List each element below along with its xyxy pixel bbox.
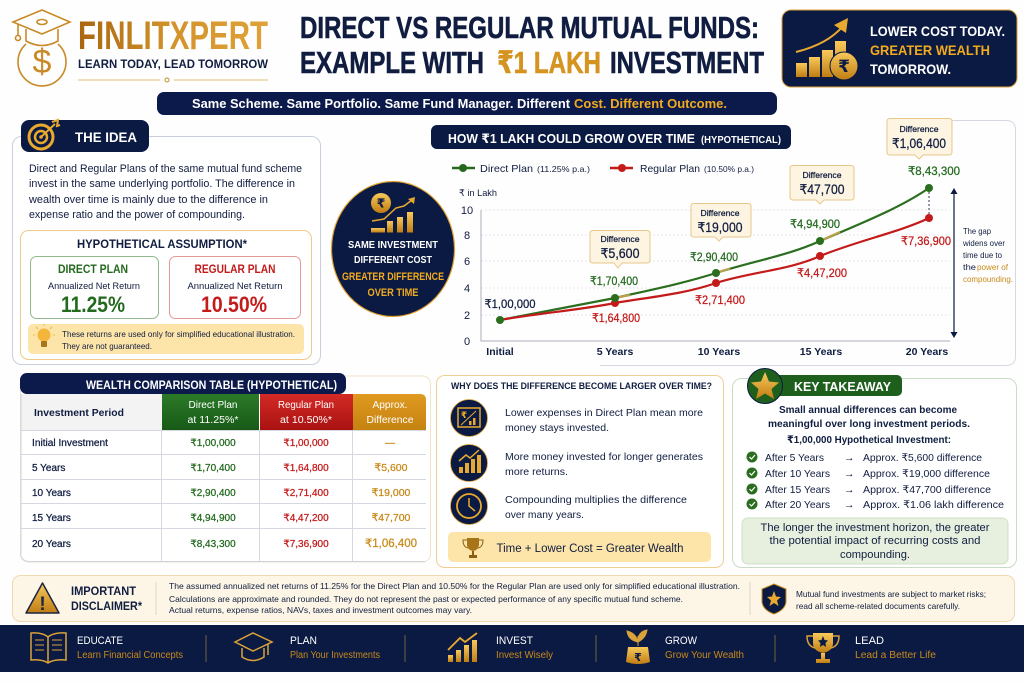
legend: (11.25% p.a.) <box>537 164 590 174</box>
footer item: grow <box>626 630 744 664</box>
table rows: ₹2,90,400 <box>190 488 236 499</box>
footer band <box>0 625 1024 672</box>
table rows: ₹19,000 <box>372 487 411 499</box>
callout: 5 year difference: ₹5,600 <box>600 246 640 261</box>
table header: Investment Period <box>34 407 124 419</box>
line chart: ₹ in Lakh <box>459 188 497 199</box>
line chart: ₹4,94,900 <box>790 217 840 231</box>
line chart: ₹1,64,800 <box>592 311 640 325</box>
text: idea paragraph: wealth over time is mainly due to the difference in <box>28 194 268 206</box>
footer item: educate: Learn Financial Concepts <box>77 650 183 661</box>
note: not guaranteed: These returns are used only for simplified educational illustration. <box>62 329 295 339</box>
callout: lower cost today: LOWER COST TODAY. <box>870 23 1005 39</box>
list: differences by period: Approx. ₹19,000 difference <box>863 468 990 480</box>
icon: rupee coin and rising bars: ₹ <box>377 196 386 210</box>
callout: 20 year difference: Difference <box>900 124 939 134</box>
table header: Direct Plan <box>188 400 238 411</box>
panel: the idea <box>12 120 320 364</box>
text: idea paragraph <box>28 163 302 221</box>
text: disclaimer body: Actual returns, expense ratios, NAVs, taxes and investment outcomes may vary. <box>169 605 472 615</box>
table rows: ₹2,71,400 <box>283 488 329 499</box>
legend: Regular Plan <box>640 163 700 175</box>
icon: gold bars, rising arrow and rupee coin <box>796 18 858 80</box>
table rows: 15 Years <box>32 513 71 524</box>
legend: Direct Plan <box>480 163 533 175</box>
callout: 10 year difference: Difference <box>700 208 740 218</box>
footer item: grow: Grow Your Wealth <box>665 650 744 661</box>
text: idea paragraph: expense ratio and the power of compounding. <box>29 209 245 221</box>
callout: 10 year difference <box>691 204 751 241</box>
callout: longer horizon: compounding. <box>840 549 910 561</box>
title: INVESTMENT <box>610 45 764 80</box>
table rows: ₹8,43,300 <box>190 539 236 550</box>
table rows: ₹1,00,000 <box>190 438 236 449</box>
callout: lower cost today: GREATER WEALTH <box>870 42 990 58</box>
card: regular plan: Annualized Net Return <box>188 281 282 292</box>
footer item: plan: PLAN <box>290 635 317 647</box>
table header: Regular Plan <box>278 400 334 411</box>
panel: why the difference grows <box>436 376 724 568</box>
list: differences by period: → <box>844 468 854 480</box>
heading: chart title: HOW ₹1 LAKH COULD GROW OVER TIME <box>448 131 695 146</box>
icon: clock <box>450 488 488 524</box>
list: differences by period: Approx. ₹5,600 difference <box>863 452 982 464</box>
panel: why the difference grows: Compounding multiplies the difference <box>505 494 687 506</box>
line chart <box>459 164 960 358</box>
table rows: ₹4,47,200 <box>283 513 329 524</box>
table rows: Initial Investment <box>32 438 108 449</box>
footer item: grow: ₹ <box>634 652 642 664</box>
callout: 15 year difference <box>790 166 854 204</box>
callout: 5 year difference: Difference <box>600 234 640 244</box>
callout: lower cost today <box>782 10 1017 87</box>
table rows: 20 Years <box>32 539 71 550</box>
table rows: ₹4,94,900 <box>190 513 236 524</box>
footer item: educate: EDUCATE <box>77 635 123 647</box>
table rows: ₹47,700 <box>372 512 411 524</box>
panel: key takeaway <box>732 368 1016 568</box>
callout: time plus lower cost: Time + Lower Cost = Greater Wealth <box>496 543 684 555</box>
logo tagline: LEARN TODAY, LEAD TOMORROW <box>78 57 269 71</box>
heading: the idea: THE IDEA <box>75 129 137 145</box>
icon: lower expenses chart: ₹ <box>461 410 467 420</box>
card: regular plan <box>170 256 300 318</box>
callout: longer horizon: The longer the investment horizon, the greater <box>760 522 990 534</box>
title: EXAMPLE WITH <box>300 45 484 80</box>
table rows: — <box>385 438 395 449</box>
list: differences by period <box>746 452 1004 511</box>
footer item: lead <box>807 633 936 663</box>
line chart: Initial <box>486 346 514 358</box>
callout: 20 year difference <box>887 118 952 159</box>
panel: important disclaimer: Mutual fund investments are subject to market risks; <box>796 589 986 599</box>
icon: lower expenses chart <box>450 400 488 436</box>
panel: important disclaimer <box>12 576 1014 622</box>
panel: important disclaimer: IMPORTANT <box>71 584 137 598</box>
panel: important disclaimer: DISCLAIMER* <box>71 599 142 613</box>
heading: chart title: (HYPOTHETICAL) <box>701 135 781 146</box>
callout: 20 year difference: ₹1,06,400 <box>892 136 946 151</box>
badge: same investment oval <box>332 182 454 316</box>
heading: the idea <box>21 120 149 152</box>
line chart: ₹1,70,400 <box>590 274 638 288</box>
line chart: 8 <box>464 230 470 242</box>
footer item: invest: Invest Wisely <box>496 650 553 661</box>
badge: same investment oval: OVER TIME <box>368 287 418 299</box>
footer item: plan: Plan Your Investments <box>290 650 380 661</box>
text: gap note: compounding. <box>963 274 1013 284</box>
icon: graduation cap and dollar coin <box>13 10 70 86</box>
line chart: 20 Years <box>906 346 948 358</box>
text: gap note: power of <box>977 262 1009 272</box>
line chart: 10 <box>461 205 473 217</box>
logo: FinLitXpert <box>13 10 269 86</box>
table header <box>21 394 426 430</box>
icon: growth bars <box>450 444 488 482</box>
note: not guaranteed: They are not guaranteed. <box>62 341 152 351</box>
card: direct plan <box>30 256 158 318</box>
list: differences by period: After 10 Years <box>765 468 830 480</box>
line chart: 4 <box>464 283 470 295</box>
heading: key takeaway <box>748 368 902 404</box>
text: idea paragraph: Direct and Regular Plans of the same mutual fund scheme <box>29 163 302 175</box>
table rows: ₹1,06,400 <box>365 538 417 550</box>
footer item: invest <box>448 633 553 662</box>
title: DIRECT VS REGULAR MUTUAL FUNDS: <box>300 10 759 45</box>
icon: gold bars, rising arrow and rupee coin: ₹ <box>838 57 850 76</box>
text: gap note: widens over <box>962 238 1005 248</box>
icon: warning triangle <box>26 583 59 615</box>
line chart: 0 <box>464 336 470 348</box>
line chart: ₹1,00,000 <box>484 297 536 311</box>
badge: same investment oval: GREATER DIFFERENCE <box>342 271 444 283</box>
list: differences by period: → <box>844 452 854 464</box>
badge: same investment oval: DIFFERENT COST <box>354 254 433 266</box>
text: disclaimer body: Calculations are approximate and rounded. They do not represent the past or expected performance of any specific mutual fund scheme. <box>169 594 683 604</box>
heading: key takeaway: KEY TAKEAWAY <box>794 379 891 394</box>
icon: graduation cap and dollar coin: $ <box>33 43 52 81</box>
line chart: 15 Years <box>800 346 842 358</box>
line: regular plan <box>500 218 929 320</box>
line chart: 10 Years <box>698 346 740 358</box>
icon: warning triangle: ! <box>39 594 46 615</box>
callout: longer horizon: the potential impact of recurring costs and <box>770 535 980 547</box>
footer item: educate <box>31 633 183 663</box>
text: idea paragraph: invest in the same underlying portfolio. The difference in <box>29 178 295 190</box>
panel: important disclaimer: read all scheme-related documents carefully. <box>796 601 960 611</box>
footer item: grow: GROW <box>665 635 698 647</box>
panel: hypothetical assumption: HYPOTHETICAL ASSUMPTION* <box>77 239 248 251</box>
callout: longer horizon <box>742 518 1008 564</box>
text: gap note: time due to <box>963 250 1002 260</box>
panel: why the difference grows: More money invested for longer generates <box>505 451 703 463</box>
text: gap note <box>962 226 1013 284</box>
card: direct plan: Annualized Net Return <box>48 281 140 292</box>
banner: Same Scheme. Same Portfolio. Same Fund Manager. Different <box>192 97 571 111</box>
line chart: ₹4,47,200 <box>797 266 847 280</box>
banner <box>157 92 777 115</box>
legend: (10.50% p.a.) <box>704 164 754 174</box>
arrow: widening gap <box>950 188 958 338</box>
text: gap note: the <box>963 262 976 272</box>
table rows <box>32 438 417 550</box>
table header: Difference <box>366 415 414 426</box>
panel: key takeaway: ₹1,00,000 Hypothetical Investment: <box>787 434 951 446</box>
table rows: ₹1,64,800 <box>283 463 329 474</box>
panel: wealth comparison table <box>20 373 430 562</box>
table header: Approx. <box>372 400 408 411</box>
footer item: plan <box>235 633 380 661</box>
panel: why the difference grows: over many years. <box>505 509 584 521</box>
table title <box>20 373 346 394</box>
callout: time plus lower cost <box>448 532 711 562</box>
banner: Cost. Different Outcome. <box>574 97 727 111</box>
card: direct plan: 11.25% <box>61 292 125 317</box>
list: differences by period: After 20 Years <box>765 499 830 511</box>
table rows: ₹1,00,000 <box>283 438 329 449</box>
footer item: invest: INVEST <box>496 635 533 647</box>
table header: at 11.25%* <box>188 415 239 426</box>
list: differences by period: After 15 Years <box>765 484 830 496</box>
list: differences by period: After 5 Years <box>765 452 824 464</box>
table rows: ₹7,36,900 <box>283 539 329 550</box>
note: not guaranteed <box>28 324 304 354</box>
table rows: 10 Years <box>32 488 71 499</box>
panel: hypothetical assumption <box>20 230 312 360</box>
line chart: ₹2,71,400 <box>695 293 745 307</box>
table rows: 5 Years <box>32 463 65 474</box>
text: gap note: The gap <box>963 226 991 236</box>
list: differences by period: Approx. ₹1.06 lakh difference <box>863 499 1004 511</box>
callout: 15 year difference: ₹47,700 <box>800 182 844 197</box>
line: direct plan <box>500 188 929 320</box>
panel: key takeaway: meaningful over long investment periods. <box>768 418 970 430</box>
card: direct plan: DIRECT PLAN <box>58 262 128 276</box>
line chart: ₹7,36,900 <box>901 234 951 248</box>
panel: growth chart <box>431 118 1016 366</box>
card: regular plan: REGULAR PLAN <box>194 262 276 276</box>
callout: 5 year difference <box>590 230 650 268</box>
callout: 15 year difference: Difference <box>802 170 842 180</box>
line chart: ₹2,90,400 <box>690 250 738 264</box>
panel: why the difference grows: money stays invested. <box>505 422 609 434</box>
legend <box>452 163 754 175</box>
table rows: ₹5,600 <box>375 462 408 474</box>
list: differences by period: Approx. ₹47,700 difference <box>863 484 991 496</box>
line chart: 5 Years <box>597 346 633 358</box>
text: disclaimer body <box>169 581 740 615</box>
callout: lower cost today: TOMORROW. <box>870 61 951 77</box>
footer item: lead: Lead a Better Life <box>855 650 936 661</box>
panel: why the difference grows: more returns. <box>505 466 568 478</box>
card: regular plan: 10.50% <box>201 292 267 317</box>
panel: why the difference grows: Lower expenses in Direct Plan mean more <box>505 407 703 419</box>
footer item: lead: LEAD <box>855 635 884 647</box>
title: ₹1 LAKH <box>497 45 601 80</box>
panel: why the difference grows: WHY DOES THE DIFFERENCE BECOME LARGER OVER TIME? <box>451 381 712 392</box>
table rows: ₹1,70,400 <box>190 463 236 474</box>
line chart: 2 <box>464 310 470 322</box>
heading: chart title <box>431 125 791 149</box>
table title: WEALTH COMPARISON TABLE (HYPOTHETICAL) <box>86 380 337 392</box>
title <box>300 10 764 80</box>
text: disclaimer body: The assumed annualized net returns of 11.25% for the Direct Plan and 10.50% for the Regular Plan are used only for simplified educational illustration. <box>169 581 740 591</box>
badge: same investment oval: SAME INVESTMENT <box>348 239 439 251</box>
line chart: ₹8,43,300 <box>908 164 960 178</box>
table header: at 10.50%* <box>280 415 332 426</box>
list: differences by period: → <box>844 499 854 511</box>
logo wordmark: FINLITXPERT <box>78 14 268 58</box>
list: differences by period: → <box>844 484 854 496</box>
icon: shield <box>762 584 786 614</box>
panel: key takeaway: Small annual differences can become <box>779 404 957 416</box>
line chart: 6 <box>464 256 470 268</box>
callout: 10 year difference: ₹19,000 <box>698 220 742 235</box>
